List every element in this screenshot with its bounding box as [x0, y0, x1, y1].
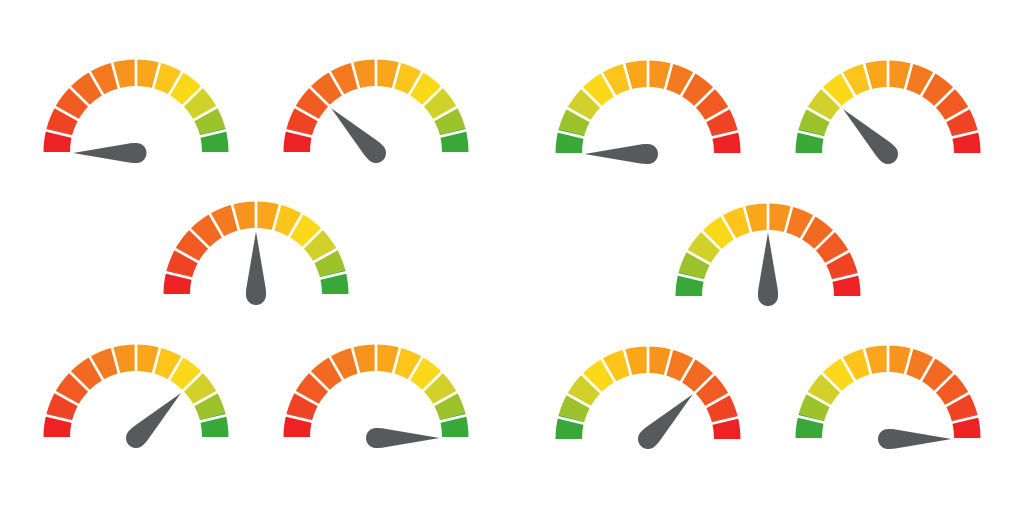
needle: [366, 428, 440, 448]
gauge: row 1, green to red, needle at far left: [552, 55, 743, 164]
needle: [584, 144, 658, 164]
colour arc: [792, 340, 983, 445]
needle: [73, 143, 146, 163]
gauge: row 1, red to green, needle at upper left: [281, 54, 472, 167]
gauge: row 1, red to green, needle at far left: [41, 54, 232, 163]
colour arc: [792, 55, 983, 160]
needle: [878, 429, 952, 449]
needle: [324, 101, 390, 167]
colour arc: [161, 196, 352, 301]
gauge: row 1, green to red, needle at upper left: [792, 55, 983, 168]
needle: [634, 387, 700, 453]
colour arc: [552, 341, 743, 446]
colour arc: [281, 339, 472, 444]
needle: [246, 232, 266, 305]
colour arc: [41, 339, 232, 444]
needle: [122, 386, 188, 452]
needle: [836, 102, 902, 168]
colour arc: [552, 55, 743, 160]
colour arc: [672, 198, 863, 303]
gauge: row 2, green to red, needle vertical: [672, 198, 863, 306]
gauge: row 3, red to green, needle at far right: [281, 339, 472, 448]
colour arc: [281, 54, 472, 159]
gauge: row 3, red to green, needle at upper right: [41, 339, 232, 452]
gauge: row 2, red to green, needle vertical: [161, 196, 352, 305]
colour arc: [41, 54, 232, 159]
needle: [758, 232, 778, 306]
gauge: row 3, green to red, needle at upper right: [552, 341, 743, 453]
gauge: row 3, green to red, needle at far right: [792, 340, 983, 449]
